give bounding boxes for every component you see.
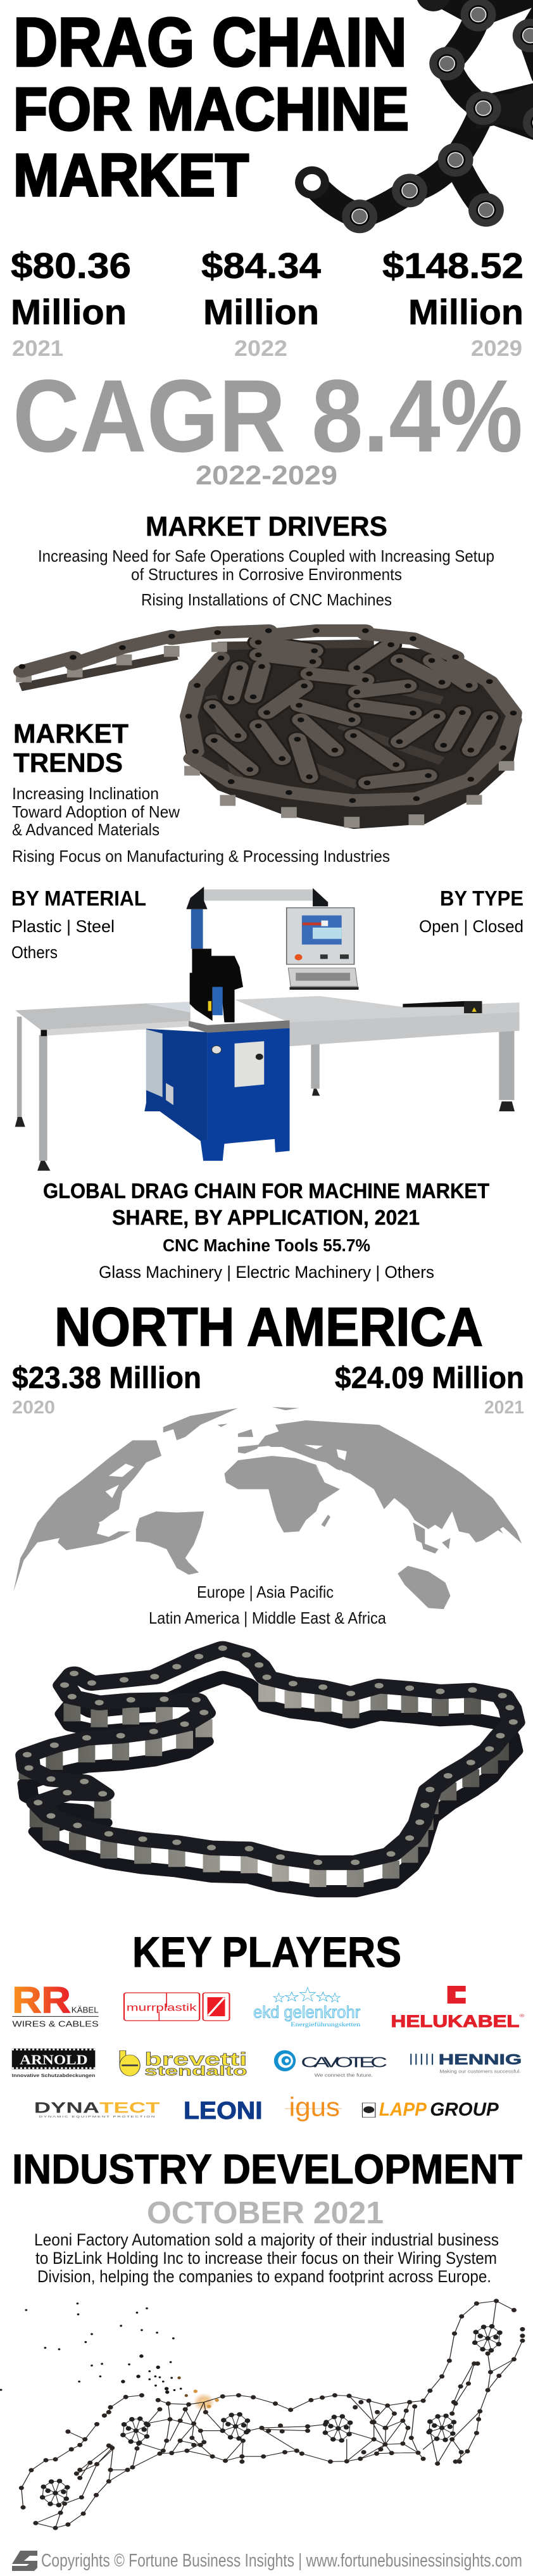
logo: Cavotec xyxy=(274,2050,387,2078)
stat: 2021 market size: 2021 xyxy=(12,336,63,361)
text: trends list: Rising Focus on Manufacturing & Processing Industries xyxy=(12,847,390,866)
title xyxy=(13,4,409,209)
stat: 2022 market size xyxy=(201,246,321,361)
stat: 2022 market size: Million xyxy=(203,292,319,332)
logo: Brevetti Stendalto xyxy=(120,2050,247,2079)
logo: Murrplastik: murrplastik xyxy=(127,2002,197,2013)
heading: market trends: MARKET xyxy=(13,719,129,749)
heading: application share xyxy=(43,1179,489,1229)
stat: 2022 market size: $84.34 xyxy=(201,246,321,286)
text: other regions: Europe | Asia Pacific xyxy=(197,1582,334,1601)
text: development description: Division, helping the companies to expand footprint across Europe. xyxy=(37,2267,491,2286)
stat: 2029 market size: Million xyxy=(408,292,524,332)
stat: 2021 market size xyxy=(11,246,131,361)
image: CNC machine with work tables xyxy=(15,887,520,1171)
panel: by material xyxy=(11,887,146,962)
text: development description: Leoni Factory Automation sold a majority of their industrial business xyxy=(34,2230,499,2249)
text: trends list: Increasing Inclination xyxy=(12,784,159,803)
illustration: bicycle-style chain, top right xyxy=(295,0,533,233)
stat: north america 2021 xyxy=(335,1361,524,1418)
text: drivers list: of Structures in Corrosive Environments xyxy=(131,565,402,584)
heading: north america: NORTH AMERICA xyxy=(54,1297,483,1358)
logo: Hennig: HENNIG xyxy=(439,2051,522,2068)
logo: RR Kabel: RR xyxy=(12,1979,71,2021)
panel: by material: Plastic | Steel xyxy=(11,917,115,936)
logo: Dynatect: DYNAMIC EQUIPMENT PROTECTION xyxy=(39,2115,154,2118)
logo: Igus xyxy=(285,2092,342,2122)
logo: RR Kabel: WIRES & CABLES xyxy=(12,2019,99,2029)
image: black roller chain loop xyxy=(27,1648,513,1891)
panel: market drivers xyxy=(38,511,494,609)
logo: Arnold xyxy=(12,2049,95,2078)
heading: application share: SHARE, BY APPLICATION, 2021 xyxy=(112,1206,420,1229)
text: other applications: Glass Machinery | Electric Machinery | Others xyxy=(99,1263,434,1282)
title: MARKET xyxy=(13,142,249,209)
logo: Arnold: ARNOLD xyxy=(20,2052,88,2068)
heading: market drivers: MARKET DRIVERS xyxy=(146,511,387,542)
logo: EKD Gelenkrohr: ★ xyxy=(329,1992,341,2005)
text: trends list xyxy=(12,784,390,866)
icon: Fortune Business Insights logo xyxy=(12,2551,37,2571)
logo: Helukabel: ® xyxy=(520,2014,525,2018)
text: development description xyxy=(34,2230,499,2286)
text: drivers list: Rising Installations of CNC Machines xyxy=(141,590,392,609)
map: world globe xyxy=(13,1407,522,1609)
logo: Cavotec: We connect the future. xyxy=(315,2073,373,2078)
panel: by type xyxy=(419,887,524,936)
stat: 2029 market size: $148.52 xyxy=(382,246,524,286)
image: coiled steel chain xyxy=(20,631,522,829)
CAGR figure: 2022-2029 xyxy=(196,460,337,491)
footer: copyright line xyxy=(12,2551,522,2571)
stat: 2022 market size: 2022 xyxy=(234,336,287,361)
logo: Murrplastik xyxy=(124,1993,229,2021)
logo: EKD Gelenkrohr: ★ xyxy=(284,1991,299,2004)
title: FOR MACHINE xyxy=(13,75,409,143)
stat: north america 2021: 2021 xyxy=(484,1398,524,1418)
panel: company logos xyxy=(12,1979,525,2125)
stat: north america 2020: 2020 xyxy=(12,1398,55,1418)
logo: EKD Gelenkrohr: ★ xyxy=(273,1992,285,2005)
text: other regions xyxy=(149,1582,386,1627)
panel: by material: BY MATERIAL xyxy=(11,887,146,910)
text: drivers list: Increasing Need for Safe Operations Coupled with Increasing Setup xyxy=(38,546,494,565)
text: drivers list xyxy=(38,546,494,609)
title: DRAG CHAIN xyxy=(13,4,407,81)
logo: EKD Gelenkrohr xyxy=(253,1984,361,2028)
panel: by type: BY TYPE xyxy=(440,887,524,910)
logo: Dynatect: DYNATECT xyxy=(34,2099,160,2116)
logo: EKD Gelenkrohr: ★ xyxy=(298,1984,317,2005)
logo: EKD Gelenkrohr: ekd gelenkrohr xyxy=(253,2004,361,2022)
illustration: network of connected nodes xyxy=(1,2301,522,2528)
logo: Brevetti Stendalto: stendalto xyxy=(144,2064,247,2079)
logo: Cavotec: CAVOTEC xyxy=(301,2054,387,2071)
logo: Leoni: LEONI xyxy=(184,2097,263,2125)
stat: north america 2020 xyxy=(12,1361,201,1418)
panel: market trends xyxy=(12,719,390,866)
stat: north america 2021: $24.09 Million xyxy=(335,1361,524,1395)
logo: Lapp Group xyxy=(362,2099,499,2120)
panel: by material: Others xyxy=(11,943,58,962)
logo: EKD Gelenkrohr: ★ xyxy=(315,1991,330,2004)
heading: market trends: TRENDS xyxy=(13,748,123,778)
panel: industry development xyxy=(12,2145,522,2286)
logo: Hennig xyxy=(411,2051,522,2074)
stat: north america 2020: $23.38 Million xyxy=(12,1361,201,1395)
logo: Lapp Group: LAPP xyxy=(379,2099,427,2120)
heading: application share: GLOBAL DRAG CHAIN FOR MACHINE MARKET xyxy=(43,1179,489,1203)
heading: market trends xyxy=(13,719,129,778)
panel: share by application xyxy=(43,1179,489,1282)
logo: EKD Gelenkrohr: Energieführungsketten xyxy=(291,2021,361,2028)
logo: Igus: igus xyxy=(289,2092,340,2122)
logo: RR Kabel: KÄBEL xyxy=(72,2005,99,2014)
text: other regions: Latin America | Middle East & Africa xyxy=(149,1608,386,1627)
text: trends list: Toward Adoption of New xyxy=(12,802,180,821)
logo: Arnold: Innovative Schutzabdeckungen xyxy=(12,2073,95,2078)
date: october 2021: OCTOBER 2021 xyxy=(147,2196,384,2230)
stat: 2021 market size: Million xyxy=(11,292,127,332)
stat: 2029 market size: 2029 xyxy=(471,336,522,361)
text: trends list: & Advanced Materials xyxy=(12,820,160,839)
stat: 2021 market size: $80.36 xyxy=(11,246,131,286)
panel: by type: Open | Closed xyxy=(419,917,524,936)
figure: CNC machine tools share: CNC Machine Tools 55.7% xyxy=(163,1235,370,1255)
logo: Helukabel xyxy=(391,1986,525,2031)
logo: Brevetti Stendalto: brevetti xyxy=(144,2050,247,2069)
heading: key players: KEY PLAYERS xyxy=(132,1928,401,1976)
stat: 2029 market size xyxy=(382,246,524,361)
